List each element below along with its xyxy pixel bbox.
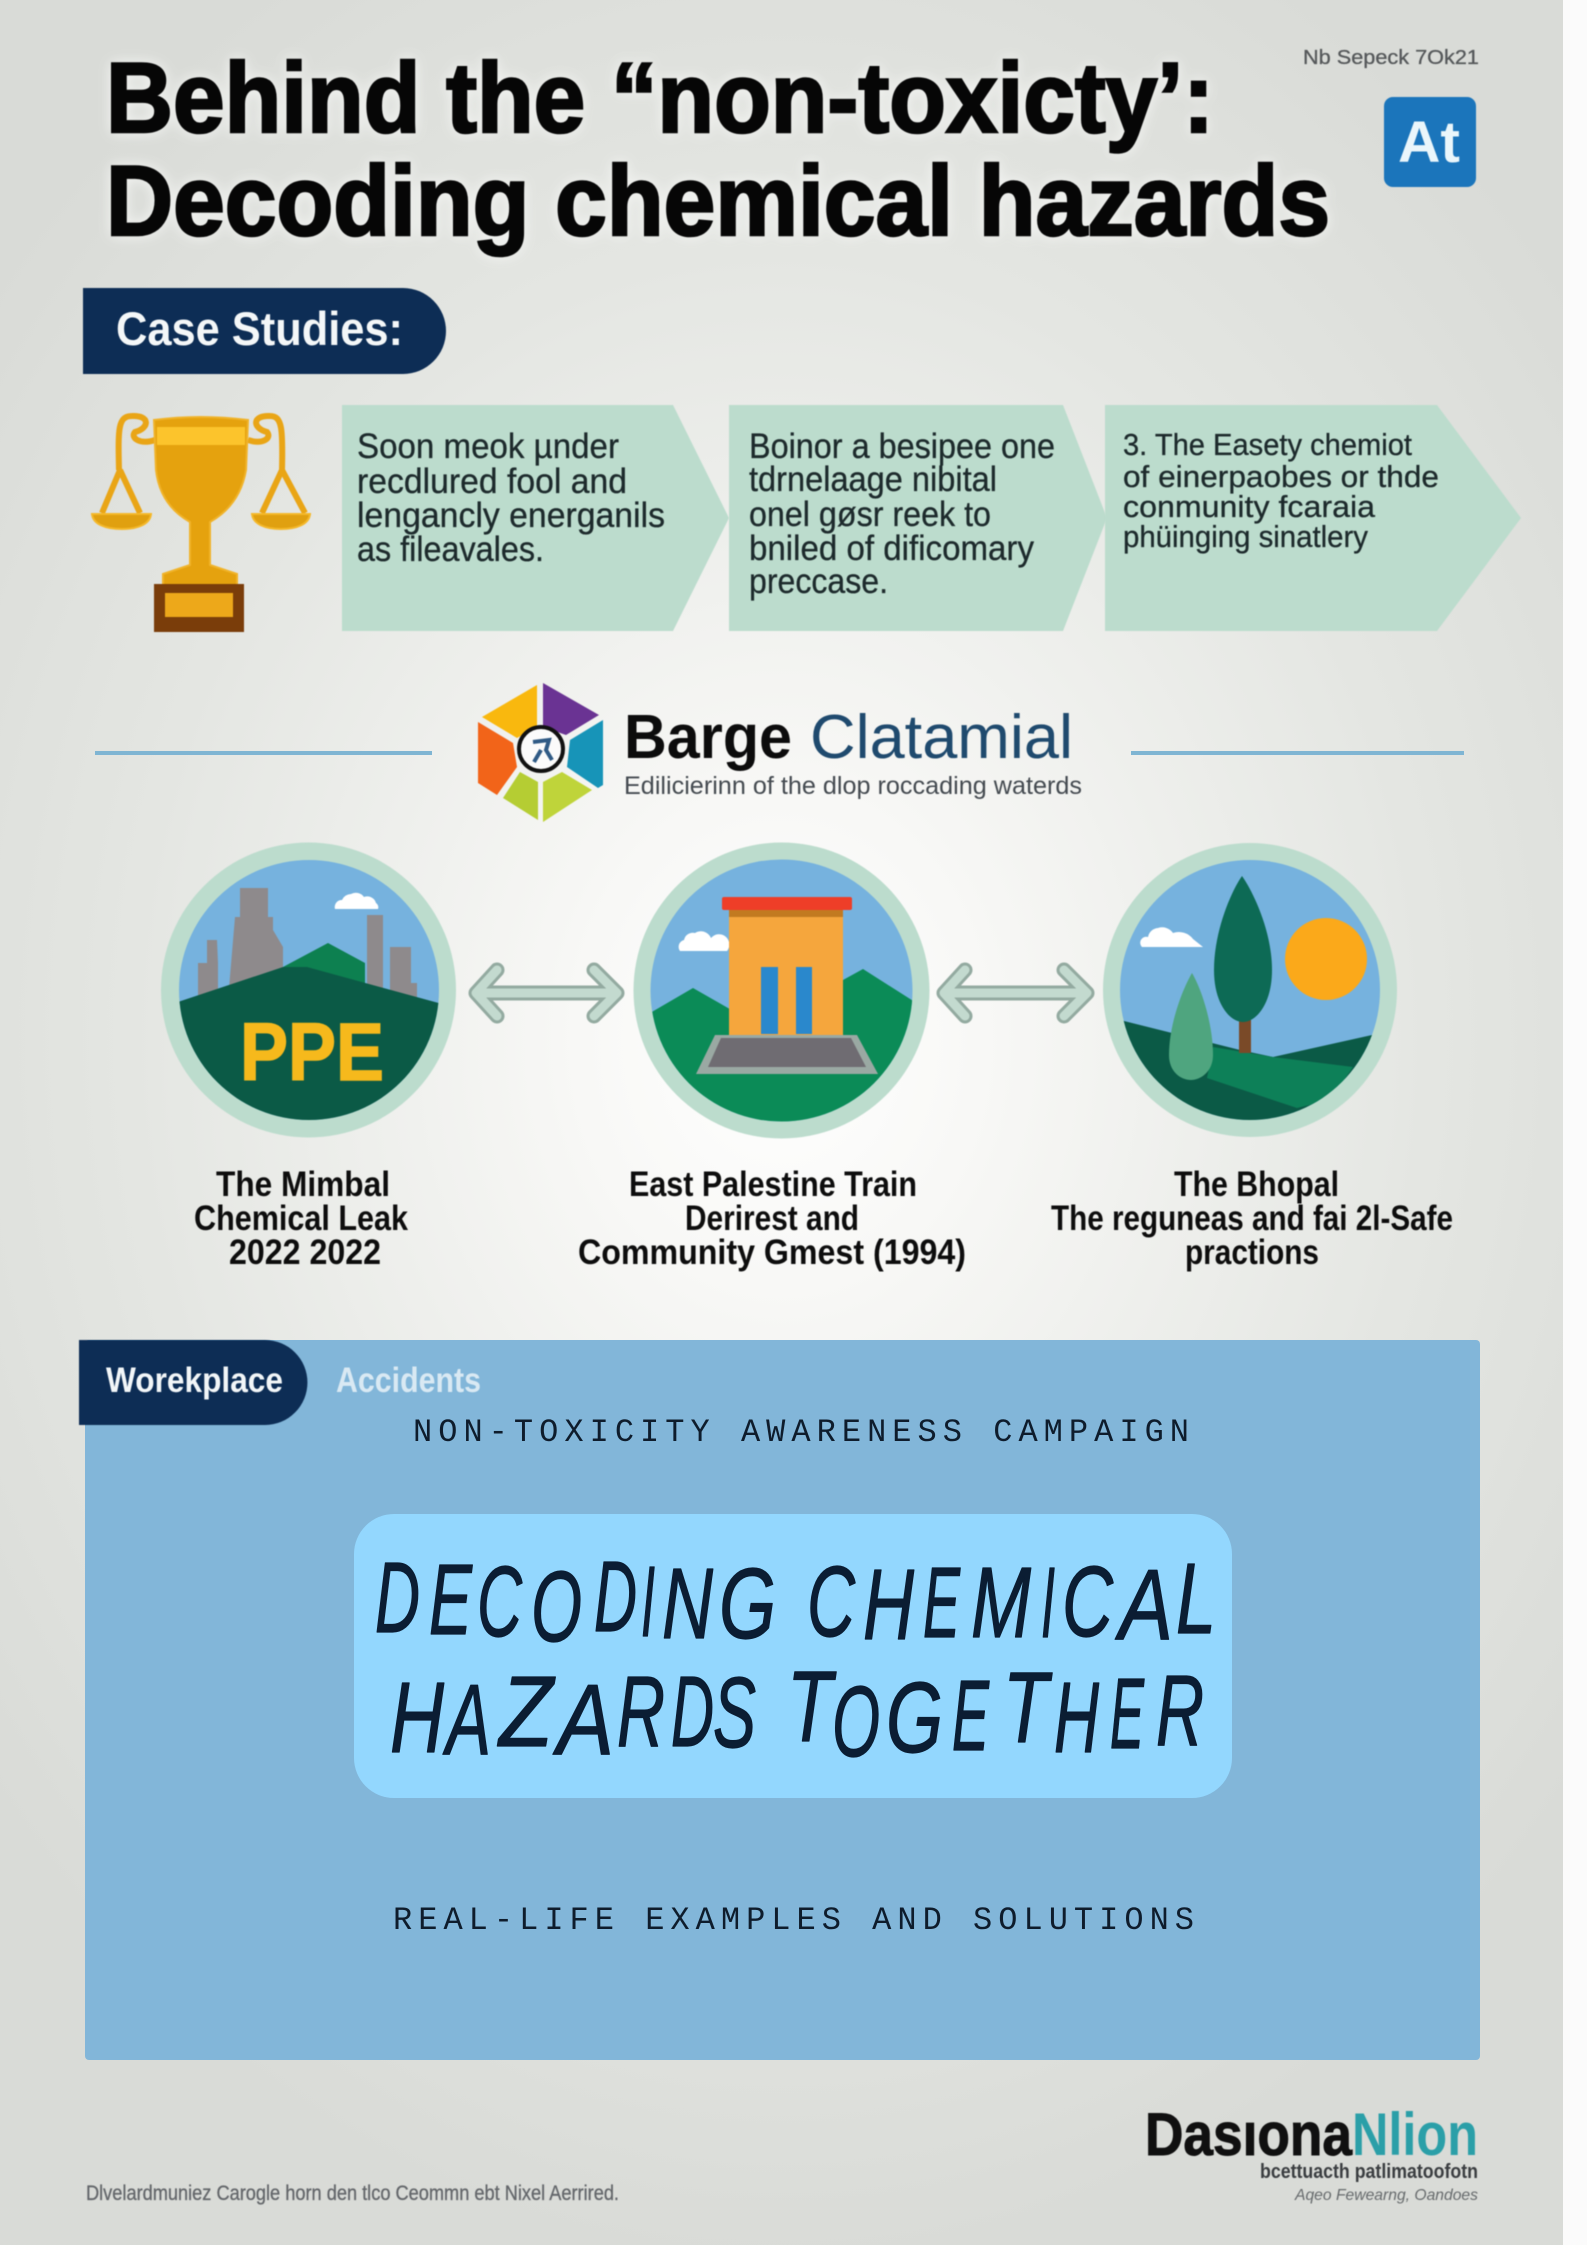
- label: The Mimbal: [194, 1165, 408, 1272]
- title: [106, 42, 1330, 256]
- title: Behind the “non-toxicty’:: [106, 42, 1214, 153]
- callout line 1: C: [477, 1546, 522, 1658]
- panel: arrow step 3: of einerpaobes or thde: [1123, 459, 1439, 494]
- label: East Palestine Train: Community Gmest (1994): [578, 1233, 966, 1272]
- callout line 2: A: [443, 1664, 491, 1776]
- callout line 1: H: [863, 1549, 915, 1661]
- footer logo: Aqeo Fewearng, Oandoes: [1294, 2187, 1478, 2204]
- label: East Palestine Train: [578, 1165, 966, 1272]
- icon: trophy with scales: [92, 416, 310, 632]
- panel: arrow step 1: Soon meok µnder: [357, 427, 619, 466]
- callout line 1: D: [594, 1541, 637, 1653]
- callout line 2: E: [1110, 1658, 1145, 1770]
- footer logo: bcettuacth patlimatoofotn: [1260, 2161, 1478, 2183]
- callout line 2: H: [390, 1662, 445, 1774]
- callout line 1: L: [1176, 1543, 1216, 1655]
- callout line 1: C: [1062, 1546, 1114, 1658]
- tab text: accidents: Accidents: [336, 1361, 481, 1400]
- panel: arrow step 1: recdlured fool and: [357, 462, 627, 501]
- panel: arrow step 1: [342, 405, 729, 631]
- label: East Palestine Train: Derirest and: [685, 1199, 859, 1238]
- heading: Barge Clatamial: [624, 703, 1082, 800]
- heading: Barge Clatamial: Clatamial: [810, 703, 1073, 772]
- panel: arrow step 2: tdrnelaage nibital: [749, 460, 997, 499]
- panel: arrow step 3: conmunity fcaraia: [1123, 489, 1376, 524]
- label: East Palestine Train: East Palestine Train: [629, 1165, 917, 1204]
- panel: arrow step 3: [1105, 405, 1521, 631]
- callout line 1: O: [531, 1551, 582, 1663]
- callout line 1: G: [719, 1548, 776, 1660]
- heading: Barge Clatamial: Barge: [624, 703, 792, 772]
- callout line 2: Z: [497, 1656, 556, 1768]
- callout line 1: I: [641, 1546, 655, 1658]
- heading: case studies pill: [83, 288, 446, 374]
- callout line 1: D: [375, 1542, 420, 1654]
- icon: PPE industrial circle: [161, 842, 456, 1138]
- panel: arrow step 1: as fileavales.: [357, 530, 544, 569]
- panel: arrow step 2: onel gøsr reek to: [749, 495, 991, 534]
- callout line 2: A: [553, 1664, 614, 1776]
- arrow: double-headed 2: [944, 970, 1087, 1016]
- panel: arrow step 2: [729, 405, 1107, 631]
- title: Decoding chemical hazards: [106, 145, 1330, 256]
- callout line 1: M: [971, 1547, 1031, 1659]
- callout line 2: [390, 1651, 1204, 1778]
- footer logo: Dasıona: [1145, 2101, 1353, 2168]
- callout line 2: O: [832, 1666, 880, 1778]
- callout line 2: H: [1054, 1662, 1099, 1774]
- label: The Mimbal: Chemical Leak: [194, 1199, 408, 1238]
- footer logo: Nlion: [1352, 2101, 1478, 2168]
- icon: PPE industrial circle: PPE: [240, 1007, 384, 1098]
- icon: hexagon logo: [478, 683, 603, 822]
- callout line 2: T: [1003, 1652, 1052, 1764]
- examples subtitle: REAL-LIFE EXAMPLES AND SOLUTIONS: [393, 1902, 1194, 1939]
- label: The Mimbal: 2022 2022: [229, 1233, 381, 1272]
- callout line 2: S: [713, 1657, 756, 1769]
- panel: arrow step 2: bniled of dificomary: [749, 529, 1034, 568]
- icon: building circle: [634, 842, 930, 1138]
- callout line 2: R: [617, 1656, 665, 1768]
- campaign subtitle: NON-TOXICITY AWARENESS CAMPAIGN: [413, 1414, 1189, 1451]
- heading: Barge Clatamial: Edilicierinn of the dlop roccading waterds: [624, 772, 1082, 800]
- label: The Bhopal: practions: [1185, 1233, 1319, 1272]
- panel: arrow step 2: Boinor a besipee one: [749, 427, 1055, 466]
- tab: workplace: Worekplace: [106, 1361, 283, 1400]
- callout line 2: E: [952, 1660, 990, 1772]
- arrow: double-headed 1: [476, 970, 617, 1016]
- top-right date label: Nb Sepeck 7Ok21: [1303, 47, 1479, 69]
- callout: decoding chemical hazards together: [354, 1514, 1232, 1798]
- icon: nature circle: [1100, 843, 1400, 1140]
- panel: arrow step 1: lengancly energanils: [357, 496, 665, 535]
- icon: At badge: At: [1398, 110, 1460, 175]
- callout line 2: T: [787, 1651, 836, 1763]
- label: The Bhopal: [1051, 1165, 1453, 1272]
- callout line 1: C: [807, 1546, 856, 1658]
- footer note: Dlvelardmuniez Carogle horn den tlco Ceommn ebt Nixel Aerrired.: [86, 2182, 619, 2205]
- callout line 1: E: [923, 1547, 961, 1659]
- footer logo: [1145, 2101, 1478, 2204]
- panel: arrow step 3: 3. The Easety chemiot: [1123, 427, 1412, 462]
- callout line 1: I: [1041, 1547, 1055, 1659]
- icon: At badge: [1384, 97, 1476, 187]
- callout line 1: N: [662, 1548, 714, 1660]
- callout line 1: E: [429, 1544, 473, 1656]
- callout line 2: G: [886, 1662, 943, 1774]
- label: The Bhopal: The reguneas and fai 2l-Safe: [1051, 1199, 1453, 1238]
- callout line 2: R: [1156, 1655, 1204, 1767]
- tab: workplace: [79, 1340, 307, 1425]
- label: The Bhopal: The Bhopal: [1174, 1165, 1339, 1204]
- label: The Mimbal: The Mimbal: [216, 1165, 390, 1204]
- callout line 2: D: [671, 1656, 714, 1768]
- panel: workplace accidents: [79, 1340, 1480, 2060]
- callout line 1: [375, 1541, 1216, 1663]
- heading: case studies pill: Case Studies:: [116, 302, 403, 355]
- callout line 1: A: [1115, 1549, 1173, 1661]
- panel: arrow step 3: phüinging sinatlery: [1123, 519, 1368, 554]
- panel: arrow step 2: preccase.: [749, 562, 888, 601]
